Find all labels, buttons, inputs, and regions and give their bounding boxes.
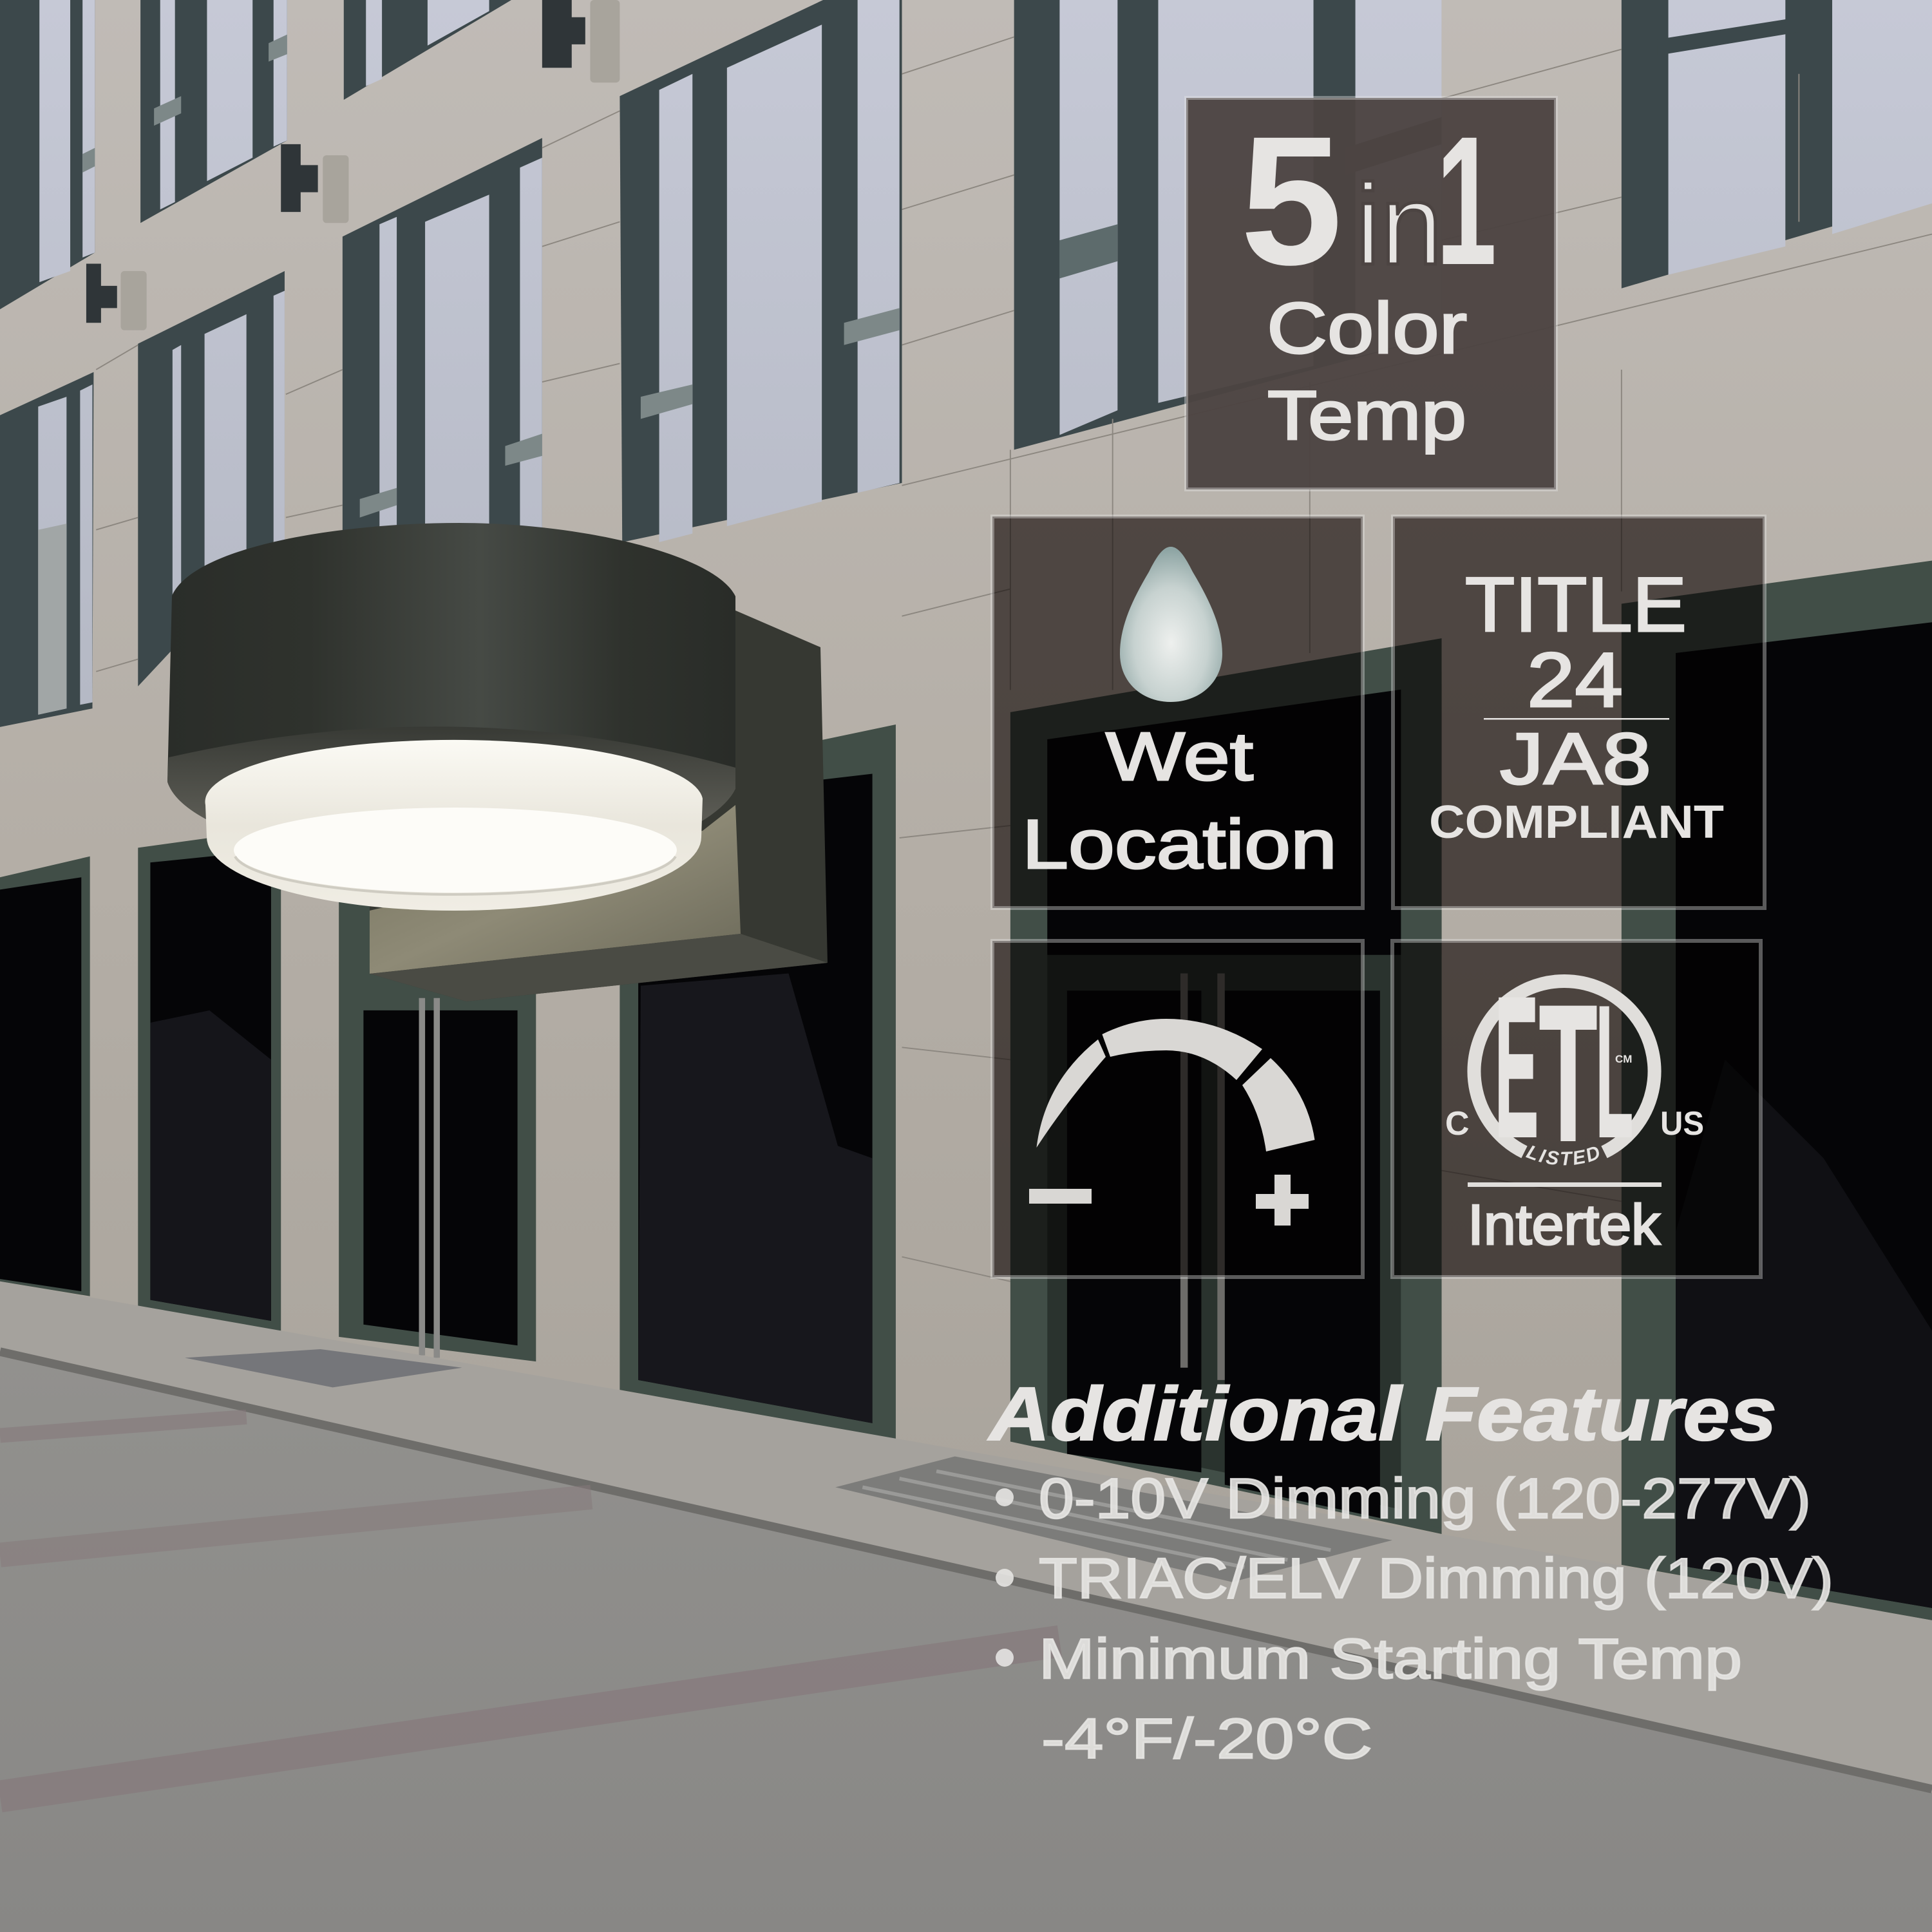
label: color temp	[1267, 288, 1467, 454]
icon: dimmer gauge	[1029, 1019, 1315, 1226]
label: title 24: 24	[1527, 637, 1623, 723]
feature: TRIAC/ELV dimming: TRIAC/ELV Dimming (120V)	[1039, 1546, 1833, 1610]
lamp cylinder body	[167, 523, 735, 821]
label: color temp: Temp	[1267, 376, 1466, 454]
product: wall lamp	[167, 523, 828, 1001]
heading: 5 in 1	[1240, 99, 1497, 303]
feature: minimum starting temp: Minimum Starting Temp	[1039, 1627, 1742, 1690]
icon: ETL listed mark: E	[1495, 955, 1539, 1179]
lamp mounting bracket	[370, 611, 828, 1001]
panel: title 24 JA8 compliant	[1393, 516, 1765, 908]
label: color temp: Color	[1267, 288, 1467, 368]
ground-floor glazing	[0, 561, 1932, 1620]
feature list	[996, 1466, 1833, 1770]
icon: minus	[1029, 1189, 1092, 1204]
icon: ETL listed mark: C	[1445, 1105, 1470, 1142]
upper-floor windows, left	[0, 0, 902, 727]
icon: ETL listed mark: CM	[1615, 1053, 1632, 1065]
feature: minimum starting temp: -4°F/-20°C	[1041, 1707, 1372, 1770]
label: JA8 compliant	[1429, 718, 1724, 848]
panel: 5 in 1 color temp	[1186, 98, 1556, 489]
heading: 5 in 1: 1	[1436, 99, 1497, 303]
panel: wet location	[992, 516, 1363, 908]
heading: additional features: Additional Features	[987, 1372, 1777, 1457]
sidewalk and paving	[0, 1282, 1932, 1932]
heading: 5 in 1: 5	[1240, 99, 1343, 303]
label: JA8 compliant: COMPLIANT	[1429, 797, 1724, 848]
icon: ETL listed mark: LISTED	[1525, 1145, 1599, 1166]
feature: minimum starting temp	[996, 1627, 1742, 1770]
glowing lens	[205, 740, 703, 911]
icon: ETL listed mark: US	[1660, 1105, 1704, 1142]
label: title 24: TITLE	[1465, 562, 1687, 648]
label: title 24	[1465, 562, 1687, 723]
icon: ETL listed mark: T	[1539, 965, 1597, 1181]
feature: 0-10V dimming: 0-10V Dimming (120-277V)	[1039, 1466, 1811, 1530]
wall panel joints	[96, 37, 1932, 1282]
icon: water drop	[1120, 547, 1222, 702]
icon: plus	[1256, 1175, 1309, 1226]
panel: dimming	[992, 941, 1363, 1277]
lamp lower lip	[167, 726, 735, 821]
small wall sconces	[86, 0, 620, 330]
icon: ETL listed mark	[1445, 955, 1704, 1256]
label: wet location: Location	[1022, 805, 1337, 883]
icon: ETL listed mark: Intertek	[1468, 1193, 1661, 1256]
heading: 5 in 1: in	[1356, 160, 1443, 289]
icon: ETL listed mark: L	[1596, 967, 1633, 1176]
label: JA8 compliant: JA8	[1500, 718, 1651, 799]
label: wet location: Wet	[1106, 719, 1253, 795]
upper-floor windows, right	[1014, 0, 1932, 450]
panel: ETL listed	[1390, 939, 1763, 1279]
label: wet location	[1022, 719, 1337, 883]
